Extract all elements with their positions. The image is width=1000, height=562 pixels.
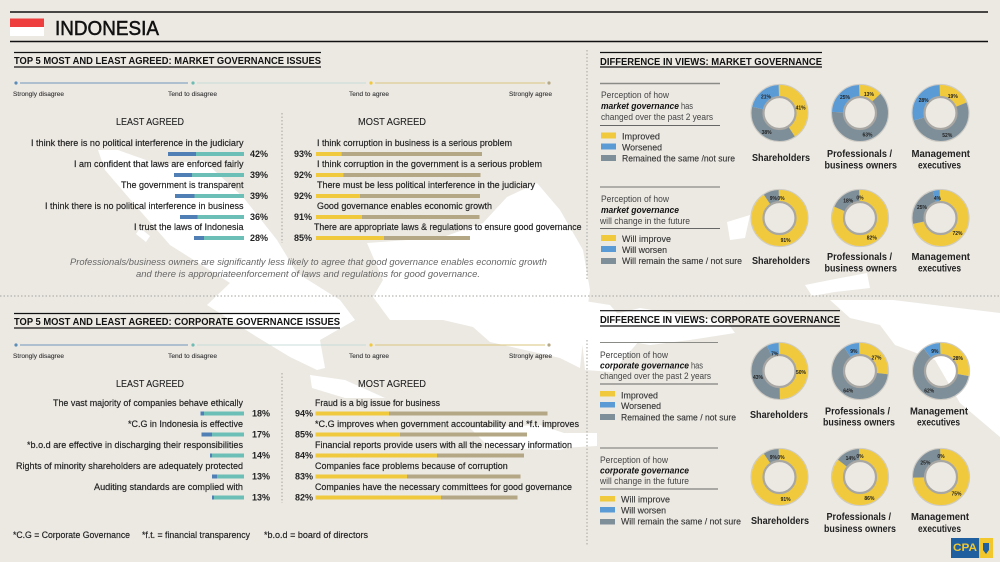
- least agreed list: 39%: [250, 191, 268, 201]
- least agreed list: 13%: [252, 472, 270, 482]
- donut: shareholders, corporate past: 43%: [753, 375, 764, 381]
- heading: market governance issues: TOP 5 MOST AND LEAST AGREED: MARKET GOVERNANCE ISSUES: [14, 56, 321, 67]
- least agreed list: 13%: [252, 492, 270, 502]
- donut: professionals, market future: 0%: [856, 196, 864, 202]
- donut: shareholders, corporate future: 9%: [770, 455, 778, 461]
- most agreed list: I think corruption in business is a serious problem: [317, 138, 512, 149]
- donut: management, market future: Management: [912, 251, 970, 263]
- donut: professionals, corporate future: Professionals /: [826, 511, 891, 523]
- least agreed list: 39%: [250, 170, 268, 180]
- donut: professionals, market past: business owners: [824, 160, 897, 172]
- donut: professionals, corporate future: 14%: [846, 456, 856, 462]
- donut: management, market future: 4%: [934, 196, 942, 202]
- most agreed list: 93%: [294, 149, 312, 159]
- legend: corporate governance future: corporate governance: [600, 466, 689, 476]
- most agreed list: 85%: [295, 430, 313, 440]
- legend: market governance future: Perception of how: [601, 194, 669, 204]
- donut: shareholders, market past: 38%: [762, 130, 772, 136]
- legend: market governance future: [599, 187, 742, 266]
- legend: corporate governance past: Worsened: [621, 401, 661, 411]
- agreement scale: Strongly agree: [509, 353, 552, 360]
- donut: professionals, corporate past: Professionals /: [825, 406, 890, 418]
- legend: market governance past: Perception of how: [601, 90, 669, 100]
- legend: market governance past: Remained the same /not sure: [622, 154, 735, 164]
- most agreed list: 85%: [294, 233, 312, 243]
- most agreed list: 94%: [295, 408, 313, 418]
- most agreed list: [295, 378, 579, 502]
- legend: corporate governance future: will change in the future: [599, 476, 689, 486]
- legend: corporate governance future: Will remain the same / not sure: [621, 516, 741, 526]
- panel: market governance issues: [13, 52, 582, 280]
- most agreed list: Fraud is a big issue for business: [315, 398, 440, 409]
- donut: shareholders, market past: 41%: [796, 106, 806, 112]
- least agreed list: I think there is no political interference in business: [45, 201, 244, 212]
- donut: shareholders, market future: 9%: [770, 196, 778, 202]
- donut: professionals, corporate future: [824, 448, 896, 535]
- donut: management, corporate past: 28%: [953, 356, 964, 362]
- footnotes: *C.G = Corporate Governance: [13, 530, 130, 541]
- donut: management, corporate future: 25%: [920, 460, 931, 466]
- most agreed list: 83%: [295, 472, 313, 482]
- commentary note: and there is appropriateenforcement of laws and regulations for good governance.: [136, 269, 480, 280]
- most agreed list: MOST AGREED: [358, 378, 426, 390]
- donut: shareholders, corporate past: [750, 342, 808, 421]
- legend: corporate governance future: Perception of how: [600, 455, 668, 465]
- least agreed list: [31, 116, 268, 243]
- donut: professionals, market past: 13%: [864, 92, 874, 98]
- donut: management, corporate past: 62%: [924, 389, 935, 395]
- most agreed list: Companies face problems because of corruption: [315, 461, 508, 472]
- donut: shareholders, market past: 21%: [761, 95, 772, 101]
- least agreed list: [16, 378, 270, 502]
- legend: corporate governance past: [600, 342, 736, 422]
- agreement scale: Strongly agree: [509, 91, 552, 98]
- most agreed list: 91%: [294, 212, 312, 222]
- donut: professionals, market future: [824, 190, 897, 274]
- most agreed list: [294, 116, 582, 243]
- least agreed list: 42%: [250, 149, 268, 159]
- legend: market governance past: Worsened: [622, 142, 662, 152]
- donut: shareholders, corporate future: 91%: [781, 497, 791, 503]
- legend: corporate governance past: changed over the past 2 years: [600, 371, 711, 381]
- donut: professionals, corporate past: 64%: [843, 389, 854, 395]
- donut: shareholders, market future: [751, 190, 810, 267]
- legend: market governance past: changed over the past 2 years: [601, 112, 713, 122]
- donut: management, market past: 19%: [948, 94, 958, 100]
- title bar: INDONESIA: [55, 18, 160, 40]
- least agreed list: 17%: [252, 430, 270, 440]
- legend: corporate governance past: Remained the same / not sure: [621, 412, 736, 422]
- donut: professionals, market past: 25%: [840, 95, 851, 101]
- most agreed list: Financial reports provide users with all the necessary information: [315, 440, 572, 451]
- most agreed list: MOST AGREED: [358, 116, 426, 128]
- title bar: [10, 12, 988, 42]
- donut: management, corporate past: Management: [910, 406, 968, 418]
- agreement scale: Tend to agree: [349, 353, 389, 360]
- donut: shareholders, market past: [751, 84, 810, 164]
- footnotes: *b.o.d = board of directors: [264, 530, 368, 541]
- donut: management, corporate future: 75%: [951, 492, 962, 498]
- legend: market governance past: has: [681, 101, 693, 111]
- agreement scale: Tend to disagree: [168, 91, 217, 98]
- donut: management, corporate future: 0%: [937, 454, 945, 460]
- donut: management, market future: [912, 190, 970, 274]
- agreement scale: Tend to disagree: [168, 353, 217, 360]
- donut: professionals, corporate future: 86%: [864, 496, 875, 502]
- donut: management, market past: 28%: [919, 98, 929, 104]
- logo: CPA Australia: CPA: [953, 542, 977, 554]
- donut: professionals, corporate past: 9%: [850, 349, 858, 355]
- least agreed list: 28%: [250, 233, 268, 243]
- donut: management, market future: 72%: [952, 231, 963, 237]
- legend: market governance future: Will worsen: [622, 245, 667, 255]
- donut: shareholders, corporate future: [751, 448, 809, 527]
- donut: management, corporate future: [911, 448, 970, 535]
- logo: CPA Australia: [951, 538, 993, 558]
- donut: professionals, market future: 82%: [867, 236, 877, 242]
- donut: management, market future: executives: [918, 262, 961, 274]
- donut: professionals, market future: 18%: [843, 198, 854, 204]
- legend: market governance past: [600, 84, 735, 164]
- legend: corporate governance past: corporate governance: [600, 360, 689, 370]
- least agreed list: 14%: [252, 450, 270, 460]
- donut: shareholders, corporate future: 0%: [777, 455, 785, 461]
- agreement scale: Strongly disagree: [13, 353, 64, 360]
- most agreed list: I think corruption in the government is a serious problem: [317, 159, 542, 170]
- least agreed list: *b.o.d are effective in discharging their responsibilities: [27, 440, 243, 451]
- commentary note: [70, 257, 547, 280]
- agreement scale: [13, 343, 552, 360]
- legend: corporate governance future: [599, 448, 741, 526]
- least agreed list: The vast majority of companies behave ethically: [53, 398, 243, 409]
- donut: shareholders, market future: Shareholders: [752, 255, 810, 267]
- legend: corporate governance future: Will improve: [621, 494, 670, 504]
- donut: professionals, corporate future: 0%: [856, 454, 864, 460]
- legend: corporate governance past: has: [691, 360, 703, 370]
- donut: shareholders, market past: Shareholders: [752, 152, 810, 164]
- donut: professionals, market past: [824, 84, 897, 172]
- donut: management, market future: 25%: [917, 205, 928, 211]
- donut: management, corporate past: 9%: [931, 349, 939, 355]
- donut: management, market past: [912, 84, 970, 172]
- panel: difference in views, corporate governance: [599, 311, 970, 535]
- commentary note: Professionals/business owners are significantly less likely to agree that good governance enables economic growth: [70, 257, 547, 268]
- donut: professionals, market future: Professionals /: [827, 251, 892, 263]
- legend: corporate governance past: Perception of how: [600, 350, 668, 360]
- donut: professionals, market past: 63%: [862, 133, 873, 139]
- donut: management, corporate past: executives: [917, 416, 960, 428]
- least agreed list: The government is transparent: [121, 180, 244, 191]
- heading: corporate governance issues: TOP 5 MOST AND LEAST AGREED: CORPORATE GOVERNANCE ISSUES: [14, 317, 340, 328]
- legend: corporate governance past: Improved: [621, 390, 658, 400]
- most agreed list: 92%: [294, 191, 312, 201]
- agreement scale: Tend to agree: [349, 91, 389, 98]
- least agreed list: I am confident that laws are enforced fairly: [74, 159, 244, 170]
- least agreed list: *C.G in Indonesia is effective: [128, 419, 243, 430]
- donut: professionals, corporate past: 27%: [871, 356, 882, 362]
- donut: management, market past: 52%: [942, 133, 953, 139]
- donut: shareholders, market future: 0%: [777, 196, 785, 202]
- legend: market governance future: market governance: [601, 205, 679, 215]
- least agreed list: Rights of minority shareholders are adequately protected: [16, 461, 243, 472]
- most agreed list: 82%: [295, 492, 313, 502]
- least agreed list: Auditing standards are complied with: [94, 482, 243, 493]
- panel: corporate governance issues: [13, 314, 579, 541]
- agreement scale: [13, 81, 552, 98]
- legend: market governance future: Will remain the same / not sure: [622, 256, 742, 266]
- donut: professionals, corporate past: business owners: [823, 416, 895, 428]
- legend: corporate governance future: Will worsen: [621, 506, 666, 516]
- donut: professionals, market future: business owners: [824, 262, 897, 274]
- heading: difference in views, market governance: DIFFERENCE IN VIEWS: MARKET GOVERNANCE: [600, 57, 822, 68]
- least agreed list: I trust the laws of Indonesia: [134, 222, 244, 233]
- donut: professionals, corporate past: [823, 342, 895, 428]
- donut: shareholders, corporate past: Shareholders: [750, 409, 808, 421]
- donut: management, corporate future: executives: [918, 523, 961, 535]
- donut: management, market past: Management: [912, 148, 970, 160]
- legend: market governance past: market governance: [601, 101, 679, 111]
- donut: shareholders, corporate future: Shareholders: [751, 515, 809, 527]
- icon: Indonesian flag: [10, 18, 44, 36]
- heading: difference in views, corporate governance: DIFFERENCE IN VIEWS: CORPORATE GOVERNANCE: [600, 315, 840, 326]
- most agreed list: Good governance enables economic growth: [317, 201, 492, 212]
- donut: management, corporate future: Management: [911, 511, 969, 523]
- least agreed list: LEAST AGREED: [116, 116, 184, 128]
- least agreed list: 18%: [252, 408, 270, 418]
- most agreed list: 92%: [294, 170, 312, 180]
- most agreed list: There must be less political interference in the judiciary: [317, 180, 535, 191]
- footnotes: [13, 530, 368, 541]
- most agreed list: *C.G improves when government accountability and *f.t. improves: [315, 419, 579, 430]
- donut: management, market past: executives: [918, 160, 961, 172]
- most agreed list: 84%: [295, 450, 313, 460]
- footnotes: *f.t. = financial transparency: [142, 530, 250, 541]
- donut: management, corporate past: [910, 342, 970, 428]
- donut: shareholders, corporate past: 7%: [771, 352, 779, 358]
- panel: difference in views, market governance: [599, 52, 970, 274]
- least agreed list: I think there is no political interference in the judiciary: [31, 138, 244, 149]
- legend: market governance future: will change in the future: [599, 216, 690, 226]
- most agreed list: Companies have the necessary committees for good governance: [315, 482, 572, 493]
- legend: market governance past: Improved: [622, 132, 660, 142]
- agreement scale: Strongly disagree: [13, 91, 64, 98]
- donut: shareholders, corporate past: 50%: [796, 370, 807, 376]
- least agreed list: 36%: [250, 212, 268, 222]
- donut: shareholders, market future: 91%: [781, 238, 791, 244]
- legend: market governance future: Will improve: [622, 234, 671, 244]
- most agreed list: There are appropriate laws & regulations to ensure good governance: [314, 222, 582, 233]
- donut: professionals, corporate future: business owners: [824, 523, 896, 535]
- donut: professionals, market past: Professionals /: [827, 148, 892, 160]
- least agreed list: LEAST AGREED: [116, 378, 184, 390]
